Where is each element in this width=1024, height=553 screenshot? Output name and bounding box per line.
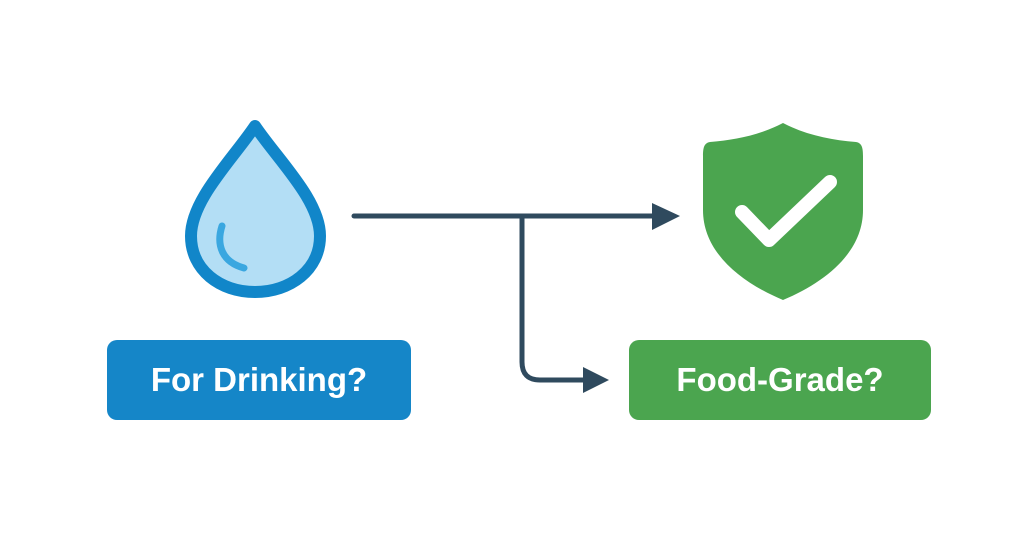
- icon: water drop: [191, 126, 320, 292]
- label: For Drinking?: [107, 340, 411, 420]
- label: For Drinking?: For Drinking?: [151, 361, 367, 398]
- icon: shield with check: [703, 123, 863, 300]
- arrow: to shield: [354, 203, 680, 230]
- arrow: branch to food-grade: [522, 216, 609, 393]
- label: Food-Grade?: Food-Grade?: [676, 361, 884, 398]
- label: Food-Grade?: [629, 340, 931, 420]
